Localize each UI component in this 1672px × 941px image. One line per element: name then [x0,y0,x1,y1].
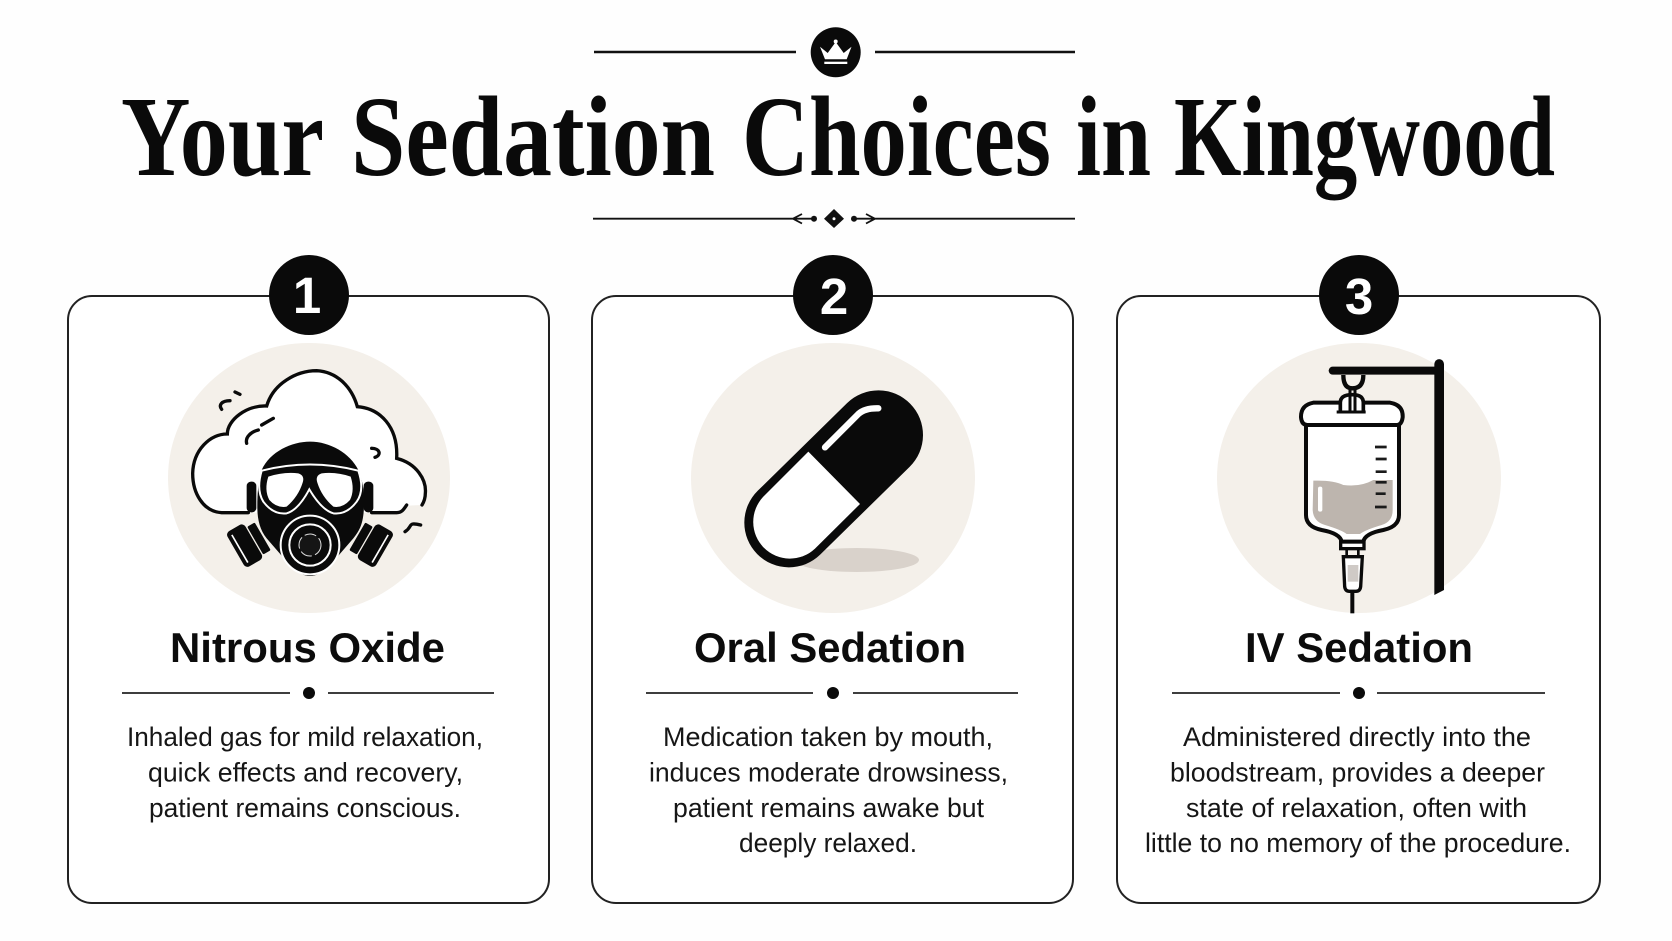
number badge 2: 2 [820,268,848,325]
description: nitrous oxide: Inhaled gas for mild relaxation, [127,722,483,752]
description: nitrous oxide: quick effects and recovery, [148,758,463,788]
title: Kingwood [1174,73,1555,200]
title [121,73,1555,200]
description: oral sedation: Medication taken by mouth, [663,722,993,752]
description: oral sedation: deeply relaxed. [739,828,917,858]
number badge 2 [793,255,873,335]
description: iv sedation: state of relaxation, often with [1186,793,1527,823]
panel: oral sedation [592,255,1073,903]
description: iv sedation: little to no memory of the procedure. [1145,828,1571,858]
number badge 3: 3 [1345,268,1373,325]
heading: nitrous oxide: Nitrous Oxide [170,624,445,671]
description: oral sedation [649,722,1008,858]
description: nitrous oxide [127,722,483,823]
card divider [1172,687,1545,699]
number badge 1: 1 [293,267,321,324]
number badge 3 [1319,255,1399,335]
icon: capsule pill [691,343,975,613]
number badge 1 [269,255,349,335]
description: iv sedation: bloodstream, provides a deeper [1170,758,1545,788]
icon: gas mask with cloud [168,343,450,613]
card divider [646,687,1018,699]
title: Choices [742,73,1051,200]
description: iv sedation [1145,722,1571,858]
heading: iv sedation: IV Sedation [1245,624,1473,671]
title: in [1076,73,1151,200]
title: Your [121,73,324,200]
panel: iv sedation [1117,255,1600,903]
description: iv sedation: Administered directly into the [1183,722,1531,752]
heading: oral sedation: Oral Sedation [694,624,966,671]
panel: nitrous oxide [68,255,549,903]
icon: iv drip bag on pole [1217,343,1501,613]
header crown ornament [594,27,1075,77]
title divider ornament [593,209,1075,228]
title: Sedation [351,73,715,200]
description: nitrous oxide: patient remains conscious. [149,793,461,823]
description: oral sedation: patient remains awake but [673,793,984,823]
card divider [122,687,494,699]
description: oral sedation: induces moderate drowsiness, [649,758,1008,788]
